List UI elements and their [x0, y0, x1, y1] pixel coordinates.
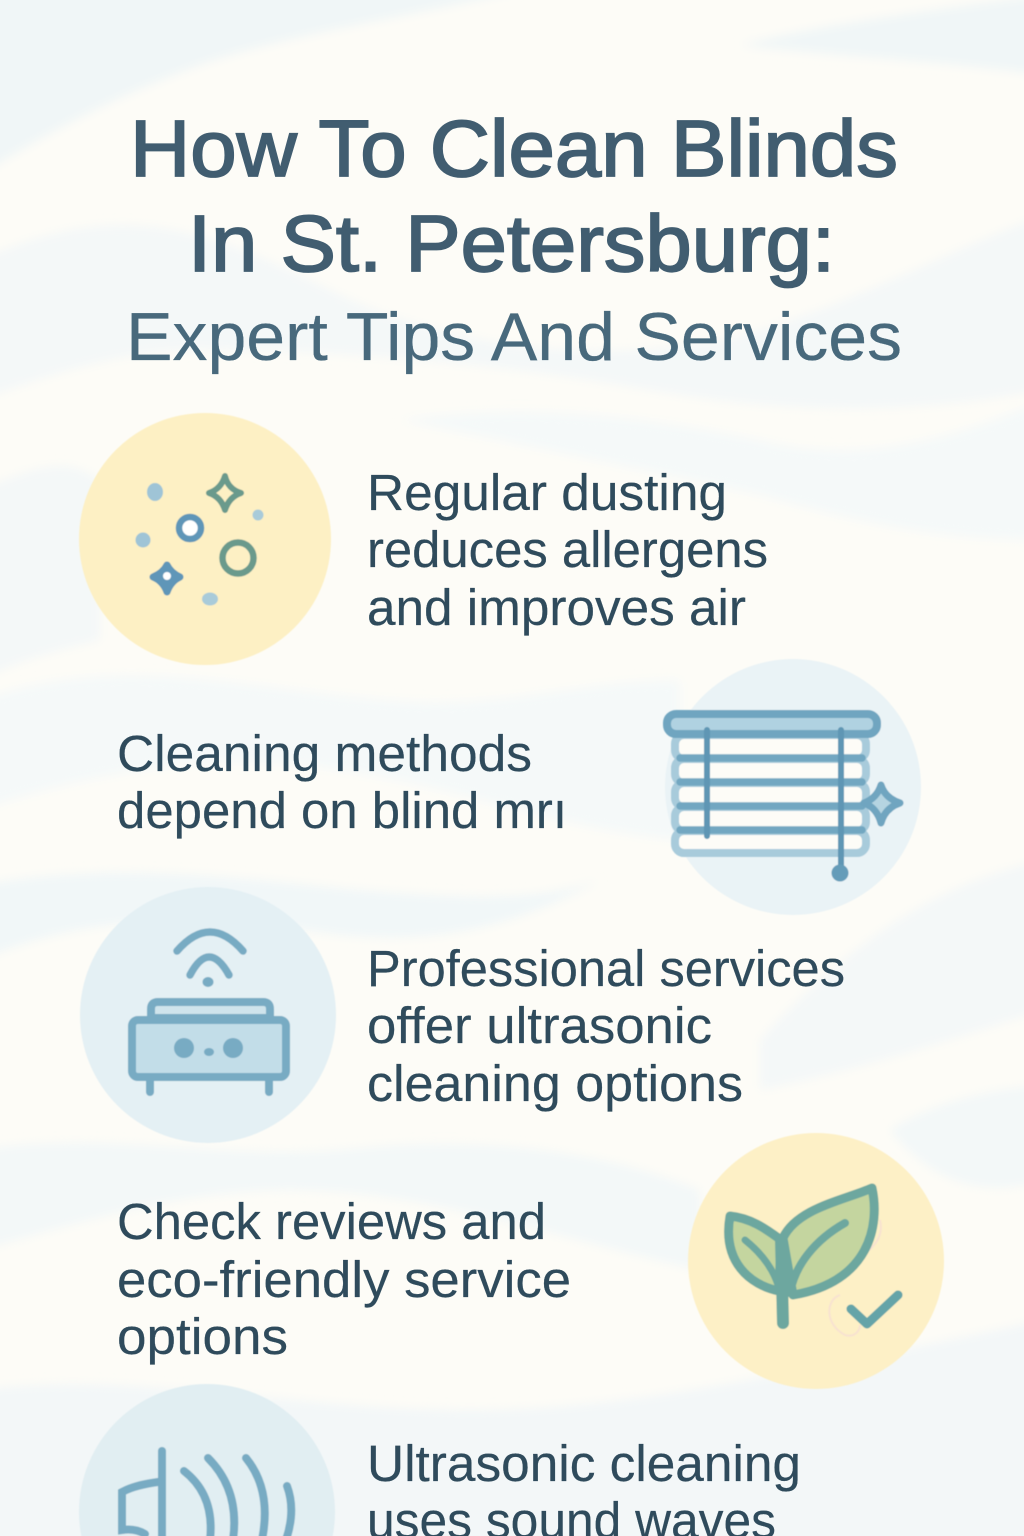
icon: window blinds [665, 659, 921, 915]
text: professional services [367, 940, 845, 1112]
icon: sound waves [79, 1384, 335, 1536]
panel: ultrasonic cleaning [79, 1384, 801, 1536]
text: regular dusting: reduces allergens [367, 521, 768, 578]
text: cleaning methods: Cleaning methods [117, 725, 532, 782]
title: In St. Petersburg: [188, 199, 835, 288]
icon: dust particles [79, 413, 331, 665]
icon: ultrasonic cleaner [80, 887, 336, 1143]
title [126, 104, 902, 375]
text: regular dusting [367, 464, 768, 636]
text: professional services: cleaning options [367, 1055, 743, 1112]
text: professional services: Professional services [367, 940, 845, 997]
panel: regular dusting [79, 413, 768, 665]
text: check reviews [117, 1193, 571, 1365]
text: regular dusting: and improves air [367, 579, 746, 636]
text: cleaning methods: depend on blind mrı [117, 782, 567, 839]
title: How To Clean Blinds [130, 104, 898, 193]
text: check reviews: eco-friendly service [117, 1251, 571, 1308]
text: regular dusting: Regular dusting [367, 464, 727, 521]
icon: leaf and check [688, 1133, 944, 1389]
text: cleaning methods [117, 725, 567, 839]
text: ultrasonic cleaning: Ultrasonic cleaning [367, 1435, 801, 1492]
panel: reviews and eco-friendly [117, 1133, 944, 1389]
panel: professional services [80, 887, 845, 1143]
title: Expert Tips And Services [126, 299, 902, 375]
panel: cleaning methods [117, 659, 921, 915]
text: check reviews: options [117, 1308, 288, 1365]
text: ultrasonic cleaning [367, 1435, 801, 1536]
text: check reviews: Check reviews and [117, 1193, 546, 1250]
text: professional services: offer ultrasonic [367, 997, 712, 1054]
